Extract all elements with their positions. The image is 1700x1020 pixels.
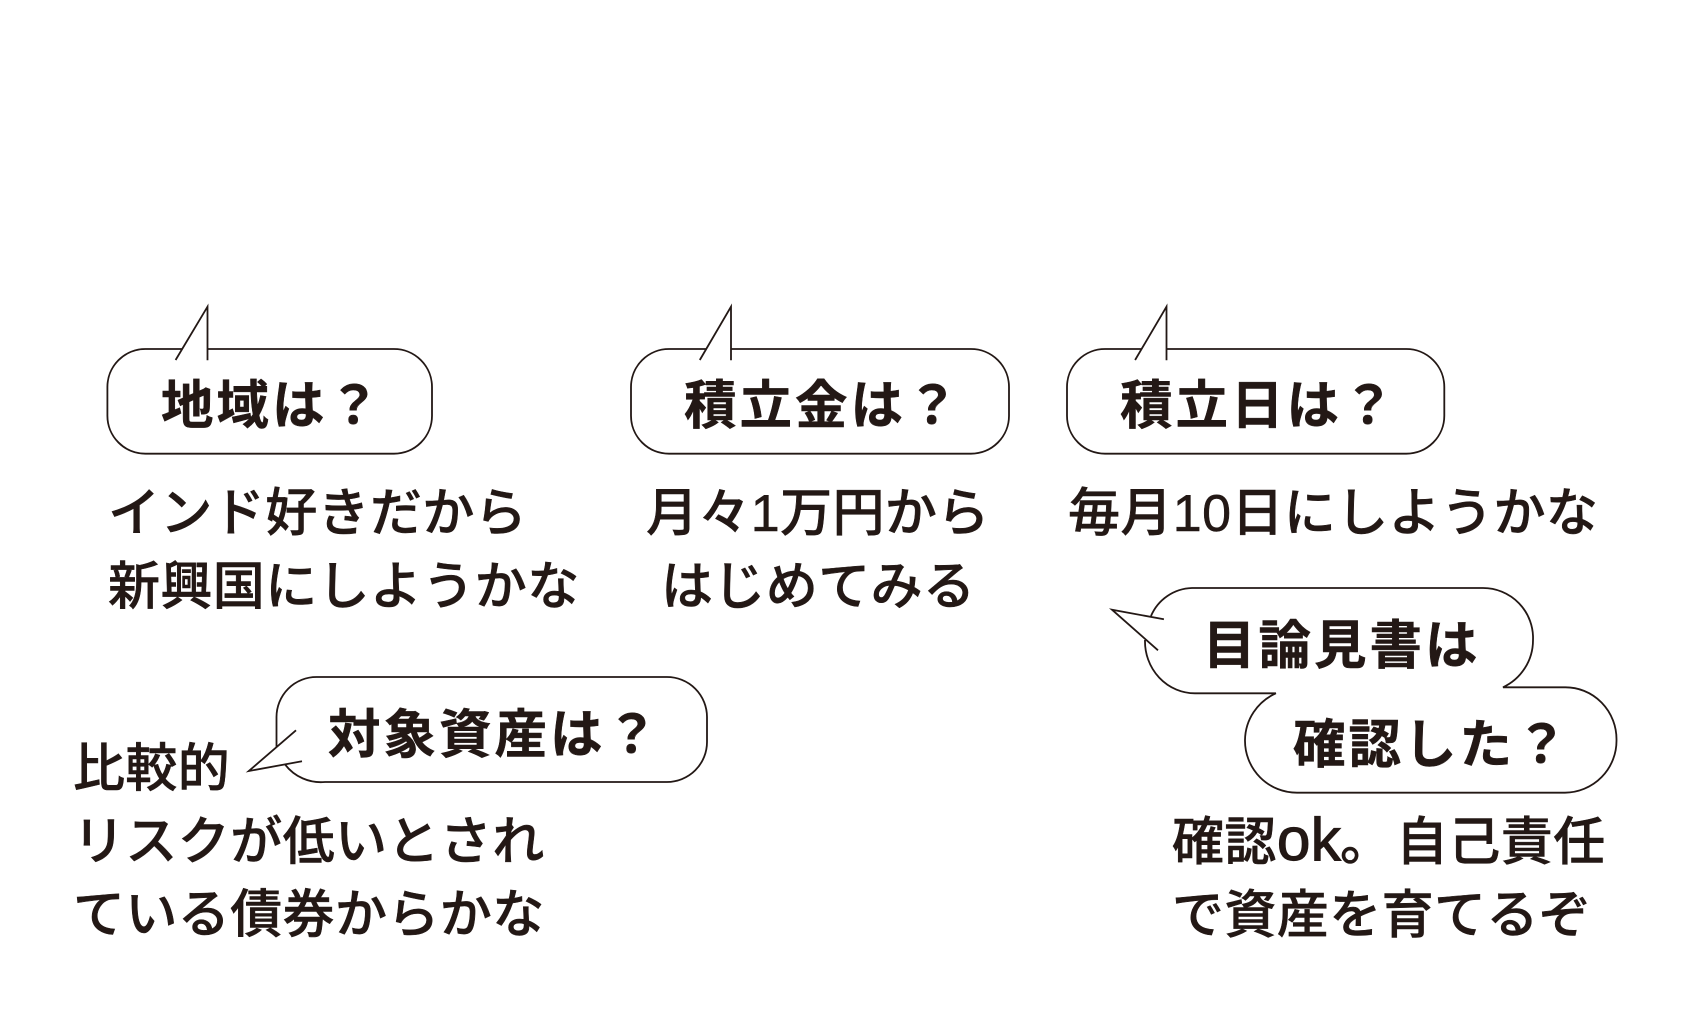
panel: region: [107, 307, 580, 616]
speech bubble: prospectus question: [1112, 588, 1617, 793]
answer text: amount: はじめてみる: [661, 558, 975, 616]
speech bubble: prospectus question: 目論見書は: [1203, 616, 1481, 676]
speech bubble: region question: 地域は？: [161, 376, 383, 436]
speech bubble: region question: [107, 307, 432, 454]
answer text: asset: リスクが低いとされ: [73, 814, 545, 872]
answer text: prospectus: 自己責任: [1396, 814, 1606, 872]
answer text: date: 毎月10日にしようかな: [1068, 485, 1598, 543]
panel: contribution date: [1067, 307, 1598, 543]
answer text: asset: 比較的: [73, 740, 230, 798]
answer text: asset: ている債券からかな: [73, 886, 545, 944]
answer text: prospectus: 確認: [1172, 814, 1277, 872]
panel: target asset: [73, 677, 707, 944]
speech bubble: amount question: [631, 307, 1009, 454]
panel: monthly amount: [631, 307, 1009, 616]
answer text: region: 新興国にしようかな: [108, 558, 580, 616]
speech bubble: date question: 積立日は？: [1120, 376, 1398, 436]
panel: prospectus: [1112, 588, 1617, 945]
speech bubble: amount question: 積立金は？: [684, 376, 962, 436]
answer text: prospectus: 。: [1340, 814, 1392, 872]
speech bubble: date question: [1067, 307, 1444, 454]
speech bubble: prospectus question: 確認した？: [1293, 716, 1571, 774]
answer text: prospectus: で資産を育てるぞ: [1172, 887, 1591, 945]
answer text: amount: 月々1万円から: [646, 485, 990, 543]
speech bubble: asset question: [249, 677, 707, 782]
answer text: prospectus: ok: [1277, 806, 1342, 873]
answer text: region: インド好きだから: [108, 485, 527, 543]
answer text: prospectus: [1172, 806, 1606, 945]
answer text: amount: [646, 485, 990, 616]
answer text: asset: [73, 740, 545, 944]
answer text: region: [108, 485, 580, 616]
speech bubble: asset question: 対象資産は？: [328, 706, 661, 764]
